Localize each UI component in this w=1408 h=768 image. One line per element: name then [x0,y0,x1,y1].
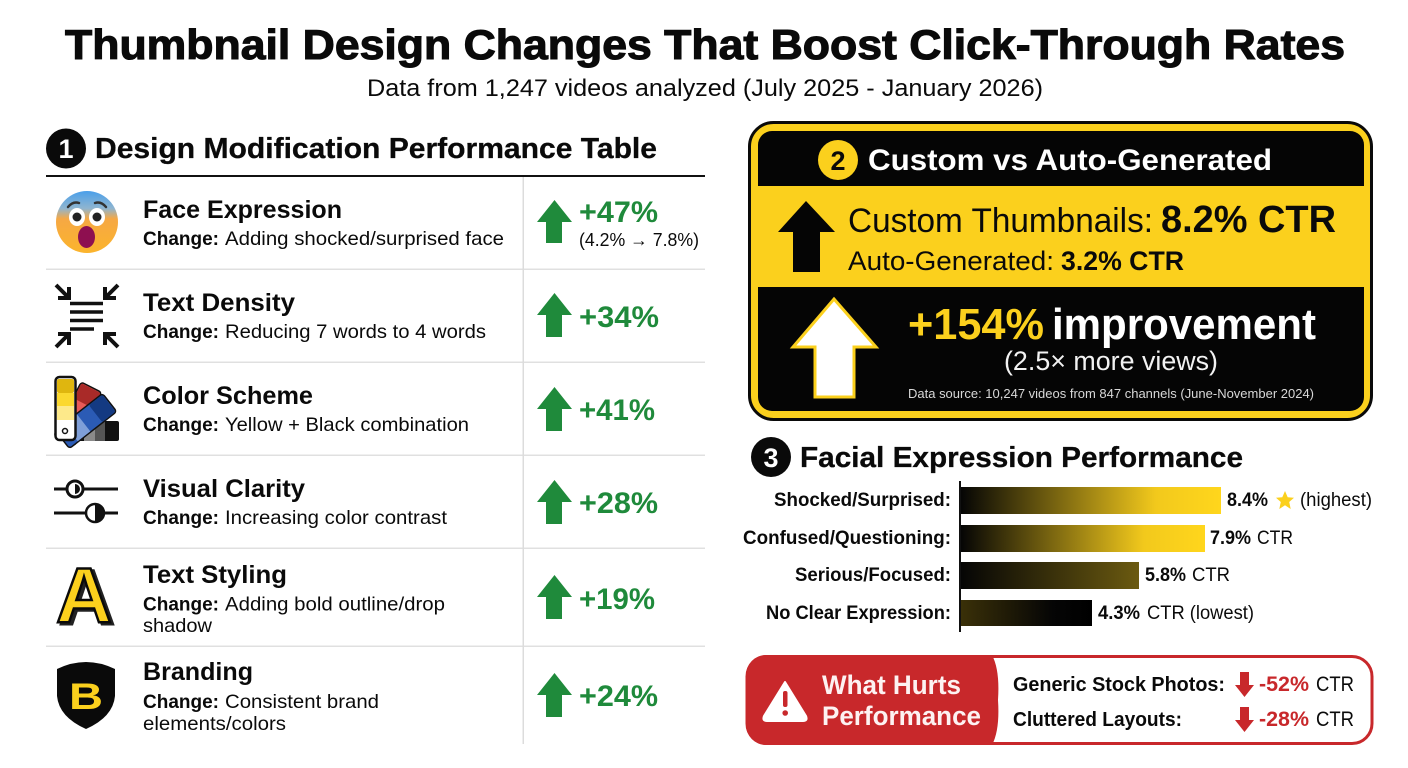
bar: confused/questioning: CTR [1257,527,1293,549]
row: branding: Change: [143,691,219,713]
bar: no clear expression [766,600,1254,626]
bar: no clear expression: CTR (lowest) [1147,602,1254,624]
bar: shocked/surprised: Shocked/Surprised: [774,489,951,511]
row: face expression: (4.2% → 7.8%) [579,230,699,250]
row: face expression: Adding shocked/surprised face [225,228,504,250]
bar: confused/questioning [743,525,1293,552]
bar: confused/questioning: Confused/Questioning: [743,527,951,549]
row: text styling: Text Styling [143,561,287,589]
icon: brand shield [57,662,115,729]
bar: shocked/surprised: (highest) [1300,489,1372,511]
row: color scheme: +41% [579,394,655,427]
row: text density: +34% [579,301,659,334]
row: branding [57,658,658,735]
row: face expression: +47% [579,196,658,229]
row: text density: Text Density [143,289,295,317]
auto-generated stat: Auto-Generated: [848,246,1054,276]
bar: shocked/surprised [774,487,1372,514]
auto-generated stat: 3.2% CTR [1061,246,1184,276]
row: color scheme: Yellow + Black combination [225,414,469,436]
auto-generated stat [848,246,1184,276]
stat: cluttered layouts [1013,707,1354,732]
bar: serious/focused [795,562,1230,589]
row: text styling: shadow [143,615,213,637]
stat: cluttered layouts: Cluttered Layouts: [1013,709,1182,731]
stat: generic stock photos [1013,672,1354,697]
row: color scheme: Color Scheme [143,382,313,410]
what hurts heading [822,670,981,731]
row: face expression [56,191,699,253]
icon: compressed text lines [56,285,118,347]
custom thumbnails stat: 8.2% CTR [1161,199,1336,241]
bar: serious/focused: 5.8% [1145,564,1186,586]
section 3 heading: 3 [763,443,779,473]
panel: facial expression performance [743,437,1372,632]
row: face expression: Change: [143,228,219,250]
bar: serious/focused: CTR [1192,564,1230,586]
row: visual clarity: +28% [579,487,658,520]
bar: no clear expression: 4.3% [1098,602,1140,624]
row: branding: Consistent brand [225,691,379,713]
icon: white up arrow [793,299,876,397]
bar: serious/focused: Serious/Focused: [795,564,951,586]
custom thumbnails stat [848,199,1336,241]
icon: brand shield: B [69,676,103,717]
bar: shocked/surprised: 8.4% [1227,489,1268,511]
row: text density [56,285,659,347]
section 2 heading: 2 [830,146,846,176]
what hurts heading: What Hurts [822,670,961,700]
row: visual clarity: Increasing color contrast [225,507,448,529]
row: face expression: Face Expression [143,196,342,224]
icon: outlined letter A: A [56,551,112,639]
row: text density: Change: [143,321,219,343]
improvement stat: +154% [908,300,1044,349]
row: branding: Branding [143,658,253,686]
section 1 heading: Design Modification Performance Table [95,133,657,165]
data source note: Data source: 10,247 videos from 847 channels (June-November 2024) [908,387,1314,401]
icon: contrast sliders [54,481,118,522]
row: visual clarity: Visual Clarity [143,475,305,503]
row: color scheme: Change: [143,414,219,436]
panel: custom vs auto-generated [750,122,1372,420]
custom thumbnails stat: Custom Thumbnails: [848,202,1153,240]
panel: what hurts performance [746,655,1372,745]
row: text styling: Adding bold outline/drop [225,594,445,616]
improvement stat [908,300,1316,349]
stat: cluttered layouts: -28% [1259,708,1309,731]
icon: colour swatch fan [54,377,119,449]
section 1 heading: 1 [58,134,74,164]
bar: no clear expression: No Clear Expression: [766,602,951,624]
row: text styling [56,551,655,639]
stat: cluttered layouts: CTR [1316,708,1354,731]
row: text styling: Change: [143,594,219,616]
what hurts heading: Performance [822,701,981,731]
title: Thumbnail Design Changes That Boost Click-Through Rates [65,21,1345,68]
section 3 heading: Facial Expression Performance [800,442,1243,474]
row: text density: Reducing 7 words to 4 words [225,321,486,343]
row: branding: elements/colors [143,713,286,735]
bar: confused/questioning: 7.9% [1210,527,1251,549]
stat: generic stock photos: -52% [1259,673,1309,696]
icon: shocked face [56,191,118,253]
improvement stat: improvement [1052,300,1316,349]
stat: generic stock photos: CTR [1316,673,1354,696]
row: text styling: +19% [579,583,655,616]
row: visual clarity [54,475,658,529]
views multiplier: (2.5× more views) [1004,346,1218,376]
row: visual clarity: Change: [143,507,219,529]
icon: warning triangle [763,682,807,721]
section 2 heading: Custom vs Auto-Generated [868,144,1272,177]
bar chart [743,481,1372,632]
stat: generic stock photos: Generic Stock Photos: [1013,674,1225,696]
row: branding: +24% [579,680,658,713]
subtitle: Data from 1,247 videos analyzed (July 2025 - January 2026) [367,75,1043,102]
icon: black up arrow [778,201,835,272]
panel: design modification performance table [46,128,705,744]
row: color scheme [54,377,655,449]
